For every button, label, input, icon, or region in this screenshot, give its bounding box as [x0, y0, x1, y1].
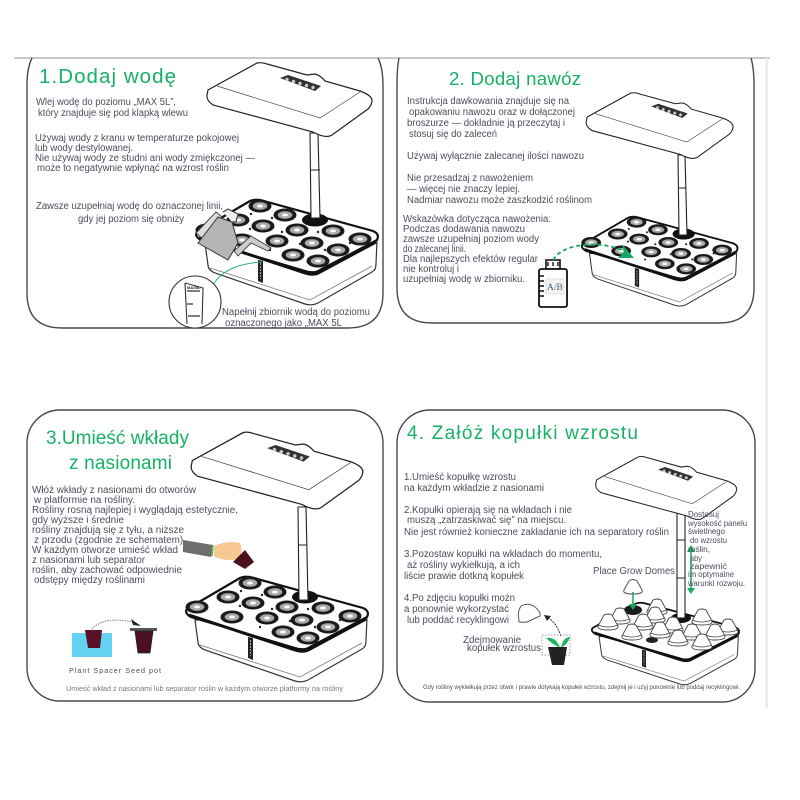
bottom caption: Umieść wkład z nasionami lub separator roślin w każdym otworze platformy na rośliny — [66, 684, 343, 693]
instructions text: 1.Umieść kopułkę wzrostu — [404, 472, 516, 483]
grow system device — [581, 93, 737, 306]
heading: 2. Dodaj nawóz — [449, 68, 581, 89]
instructions text: Rośliny rosną najlepiej i wyglądają estetycznie, — [32, 505, 238, 516]
top border line — [14, 57, 770, 59]
height adjustment note: aby — [690, 554, 702, 563]
dashed arrow to seed pot — [92, 619, 141, 629]
panel 2: add fertilizer — [397, 58, 754, 323]
instructions text: z przodu (zgodnie ze schematem). — [34, 535, 186, 546]
icon: watering can — [196, 209, 271, 260]
instructions text: 4.Po zdjęciu kopułki możn — [404, 593, 515, 604]
height adjustment note: Dostosuj — [688, 510, 719, 519]
instructions text: gdy wyższe i średnie — [32, 515, 124, 526]
magnifier: MAX 5L scale: MAX5L — [187, 285, 201, 290]
icon: removed dome — [518, 604, 540, 622]
instructions text: gdy jej poziom się obniży — [78, 214, 184, 225]
fill level caption — [222, 307, 370, 329]
instructions text: Używaj wody z kranu w temperaturze pokojowej — [35, 133, 239, 144]
fertilizing tip: Dla najlepszych efektów regular — [403, 254, 539, 265]
instructions text: — więcej nie znaczy lepiej. — [407, 184, 520, 195]
removing domes label — [463, 635, 541, 654]
instructions text: W każdym otworze umieść wkład — [32, 545, 178, 556]
instructions text: a ponownie wykorzystać — [404, 604, 509, 615]
panel frame — [397, 58, 754, 323]
instructions text: broszurze — dokładnie ją przeczytaj i — [407, 118, 565, 129]
fill level caption: Napełnij zbiornik wodą do poziomu — [222, 307, 370, 318]
removing domes label: Zdejmowanie — [463, 635, 521, 646]
magnifier: MAX 5L scale — [169, 276, 221, 328]
instructions text: Włóż wkłady z nasionami do otworów — [32, 485, 197, 496]
instructions text: odstępy między roślinami — [34, 575, 145, 586]
heading: 3.Umieść wkłady — [46, 428, 190, 449]
panel 4: add grow domes — [397, 410, 755, 702]
instructions text — [407, 96, 592, 206]
instructions text: lub wody destylowanej. — [35, 143, 133, 154]
instructions text: liście prawie dotkną kopułek — [404, 571, 524, 582]
height adjustment note: warunki rozwoju. — [687, 579, 745, 588]
fertilizing tip: do zalecanej linii. — [403, 244, 466, 255]
instructions text: 2.Kopułki opierają się na wkładach i nie — [404, 505, 572, 516]
heading: z nasionami — [69, 453, 172, 474]
instructions text: Używaj wyłącznie zalecanej ilości nawozu — [407, 151, 584, 162]
instructions text — [404, 472, 669, 626]
right border line — [765, 58, 768, 708]
icon: hand holding seed pod — [183, 540, 254, 569]
instructions text: z nasionami lub separator — [32, 555, 146, 566]
fertilizing tip — [403, 214, 551, 285]
instructions text: Nie przesadzaj z nawożeniem — [407, 173, 533, 184]
panel 1: add water — [27, 58, 383, 329]
fertilizing tip: zawsze uzupełniaj poziom wody — [403, 234, 539, 245]
icon: fertilizer bottle: A/B — [547, 283, 563, 293]
instructions text: który znajduje się pod klapką wlewu — [38, 108, 188, 119]
instructions text: stosuj się do zaleceń — [409, 129, 497, 140]
height adjustment note: im optymalne — [688, 570, 735, 579]
bottom caption: Gdy rośliny wykiełkują przez otwór i prawie dotykają kopułek wzrostu, zdejmij je i użyj ponownie lub poddaj recyklingowi. — [423, 685, 740, 691]
instructions text: Instrukcja dawkowania znajduje się na — [407, 96, 570, 107]
place domes label: Place Grow Domes — [593, 566, 675, 577]
instructions text: może to negatywnie wpłynąć na wzrost roślin — [37, 163, 229, 174]
removing domes label: kopułek wzrostus — [467, 643, 541, 654]
green height arrow — [687, 545, 695, 594]
grow system device with domes — [592, 457, 739, 685]
heading: 4. Załóż kopułki wzrostu — [407, 423, 638, 444]
instructions text — [32, 485, 238, 586]
spacer in blue square — [72, 630, 112, 657]
curved removal arrow — [544, 615, 561, 636]
height adjustment note: wysokość panelu — [687, 519, 747, 528]
pot labels: Plant Spacer Seed pot — [69, 666, 161, 675]
instructions text: Nie jest również konieczne zakładanie ich na separatory roślin — [404, 527, 669, 538]
instructions text: roślin, aby zachować odpowiednie — [32, 565, 182, 576]
instructions text: Nie używaj wody ze studni ani wody zmiękczonej — — [35, 153, 255, 164]
fertilizing tip: Podczas dodawania nawozu — [403, 224, 525, 235]
instructions text: lub poddać recyklingowi — [407, 615, 509, 626]
instructions text: Zawsze uzupełniaj wodę do oznaczonej linii, — [36, 201, 223, 212]
icon: seedling in pot — [542, 635, 570, 665]
panel frame — [397, 410, 755, 702]
seed pot — [130, 628, 157, 653]
fertilizing tip: Wskazówka dotycząca nawożenia: — [403, 214, 551, 225]
instructions text: 3.Pozostaw kopułki na wkładach do momentu, — [404, 549, 602, 560]
height adjustment note: zapewnić — [690, 562, 727, 571]
fertilizing tip: nie kontroluj i — [403, 264, 459, 275]
icon: dome with down arrow — [624, 580, 642, 610]
instructions text: rośliny znajdują się z tyłu, a niższe — [32, 525, 184, 536]
instructions text: Nadmiar nawozu może zaszkodzić roślinom — [407, 195, 592, 206]
heading: 1.Dodaj wodę — [39, 65, 176, 88]
fertilizing tip: uzupełniaj wodę w zbiorniku. — [403, 274, 525, 285]
heading — [46, 428, 190, 474]
instructions text — [35, 97, 255, 225]
height adjustment note: świetlnego — [688, 527, 726, 536]
instructions text: w platformie na rośliny. — [33, 495, 135, 506]
grow system device — [186, 432, 368, 682]
panel frame — [27, 410, 383, 701]
instructions text: muszą „zatrzaskiwać się” na miejscu. — [407, 515, 566, 526]
green dashed arrow — [553, 244, 634, 260]
instructions text: na każdym wkładzie z nasionami — [404, 483, 544, 494]
instructions text: aż rośliny wykiełkują, a ich — [407, 560, 520, 571]
height adjustment note: do wzrostu — [690, 536, 727, 545]
grow system device — [196, 63, 378, 305]
height adjustment note: roślin, — [688, 545, 710, 554]
instructions text: Wlej wodę do poziomu „MAX 5L”, — [36, 97, 176, 108]
icon: fertilizer bottle — [539, 260, 567, 307]
fill level caption: oznaczonego jako „MAX 5L — [225, 318, 343, 329]
green leader line — [213, 262, 262, 285]
panel 3: insert seed pods — [27, 410, 383, 701]
instructions text: opakowaniu nawozu oraz w dołączonej — [409, 107, 575, 118]
height adjustment note — [687, 510, 747, 588]
panel frame — [27, 58, 383, 328]
